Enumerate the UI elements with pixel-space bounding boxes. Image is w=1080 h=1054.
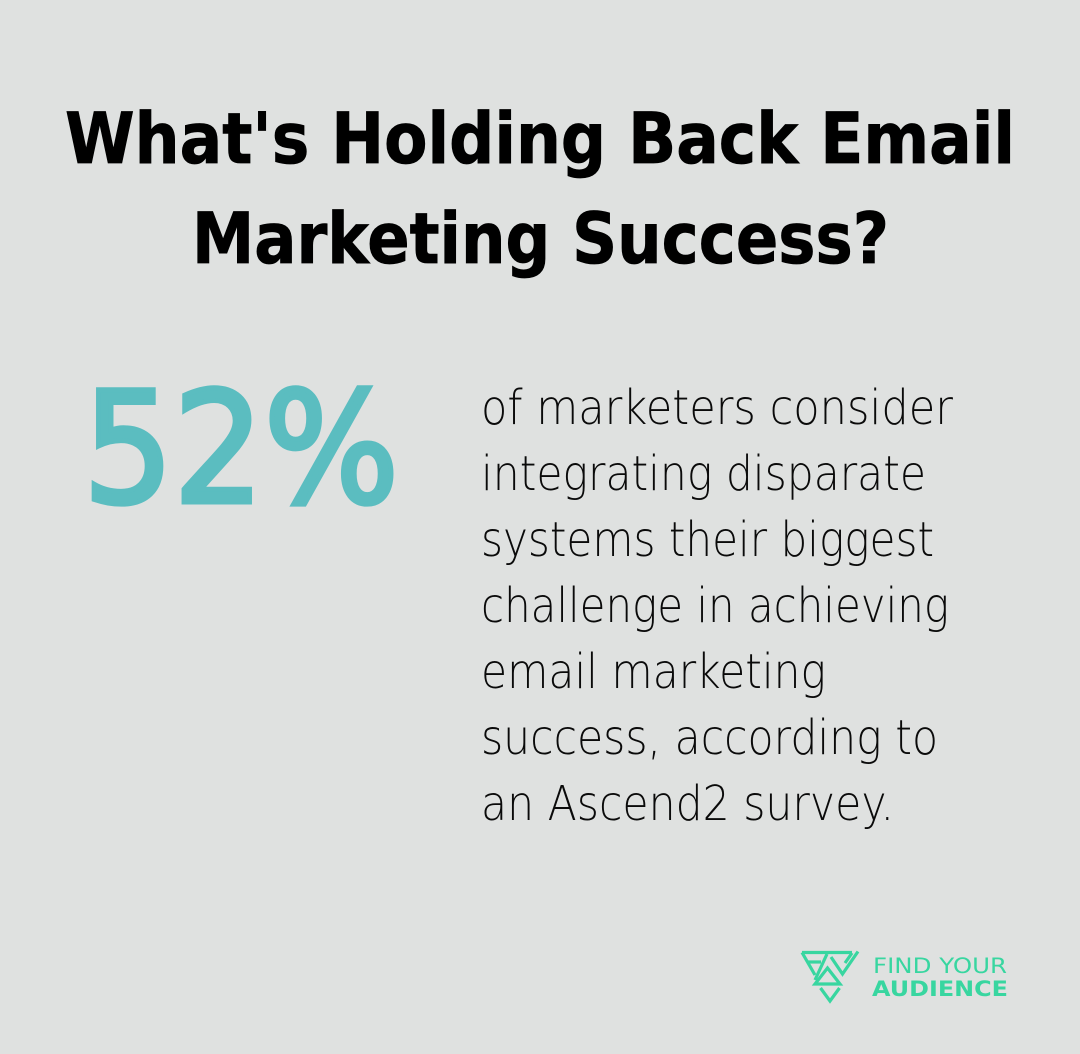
statistic description: email marketing <box>481 644 826 700</box>
statistic description: of marketers consider <box>481 380 953 436</box>
big statistic: 52%: 52% <box>83 360 399 539</box>
icon: triangle logo mark <box>802 952 858 1001</box>
logo wordmark: FIND YOUR <box>873 954 1007 978</box>
statistic description: integrating disparate <box>481 446 926 502</box>
title: Marketing Success? <box>192 198 889 280</box>
title <box>65 98 1015 280</box>
logo: Find Your Audience <box>802 952 1008 1001</box>
logo wordmark <box>872 954 1008 1001</box>
statistic description <box>481 380 953 832</box>
statistic description: systems their biggest <box>481 512 934 568</box>
statistic description: challenge in achieving <box>481 578 949 634</box>
logo wordmark: AUDIENCE <box>872 977 1008 1001</box>
statistic description: an Ascend2 survey. <box>481 776 894 832</box>
statistic description: success, according to <box>481 710 938 766</box>
